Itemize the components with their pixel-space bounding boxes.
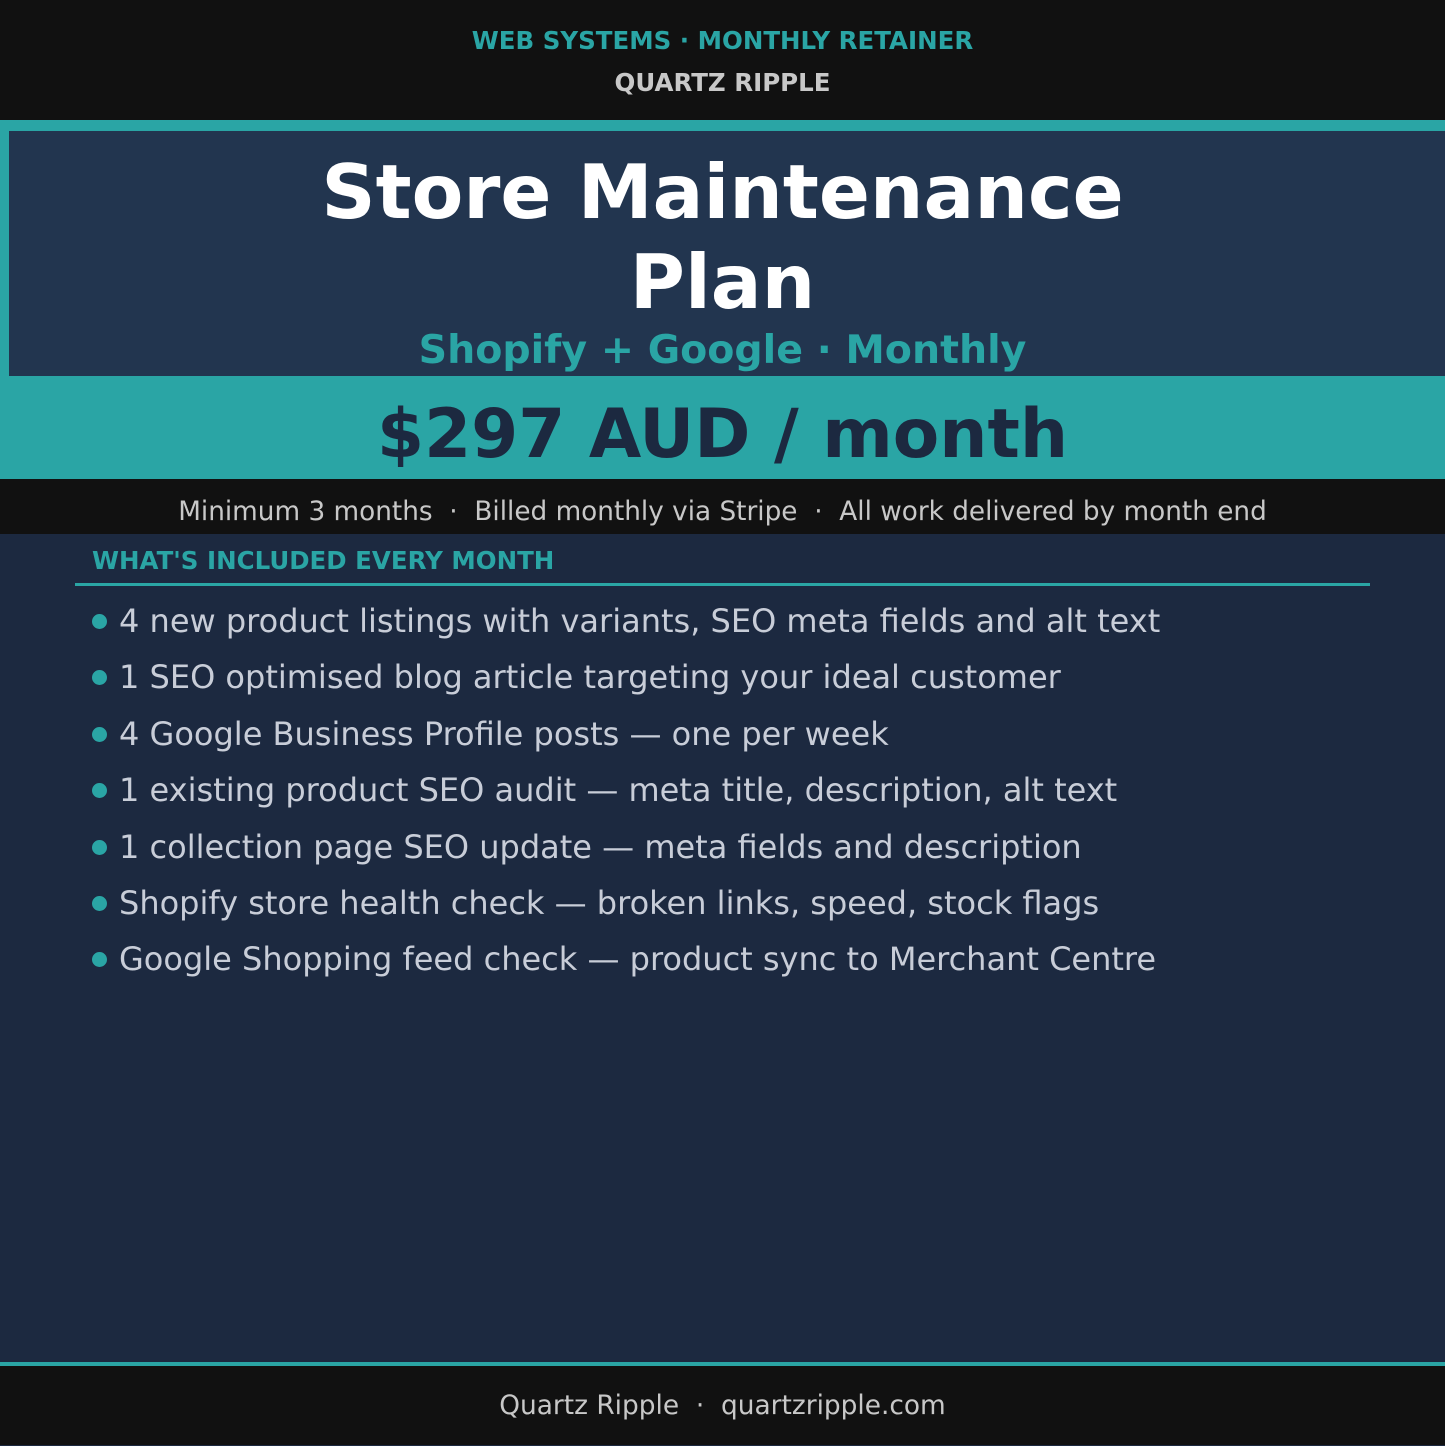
included list: Google Shopping feed check — product sync to Merchant Centre bbox=[119, 940, 1156, 978]
terms line: Minimum 3 months · Billed monthly via Stripe · All work delivered by month end bbox=[178, 497, 1267, 527]
included list: 1 collection page SEO update — meta fields and description bbox=[119, 828, 1082, 866]
brand: QUARTZ RIPPLE bbox=[615, 68, 830, 97]
subtitle: Shopify + Google · Monthly bbox=[419, 327, 1026, 373]
header bar bbox=[0, 0, 1445, 120]
included list: 1 existing product SEO audit — meta title, description, alt text bbox=[119, 771, 1117, 809]
title bbox=[321, 148, 1124, 326]
title: Plan bbox=[630, 238, 815, 326]
terms line bbox=[0, 479, 1445, 534]
footer bbox=[0, 1362, 1445, 1445]
section heading: WHAT'S INCLUDED EVERY MONTH bbox=[92, 546, 554, 575]
footer: Quartz Ripple · quartzripple.com bbox=[499, 1390, 946, 1421]
included list: Shopify store health check — broken links, speed, stock flags bbox=[119, 884, 1099, 922]
price band bbox=[0, 376, 1445, 479]
included list: 4 Google Business Profile posts — one per week bbox=[119, 715, 889, 753]
included list: 4 new product listings with variants, SEO meta fields and alt text bbox=[119, 602, 1160, 640]
included list bbox=[92, 602, 1160, 978]
title: Store Maintenance bbox=[321, 148, 1124, 236]
included list: 1 SEO optimised blog article targeting your ideal customer bbox=[119, 658, 1061, 696]
kicker: WEB SYSTEMS · MONTHLY RETAINER bbox=[472, 26, 973, 55]
price band: $297 AUD / month bbox=[377, 394, 1068, 473]
title panel bbox=[0, 120, 1445, 376]
